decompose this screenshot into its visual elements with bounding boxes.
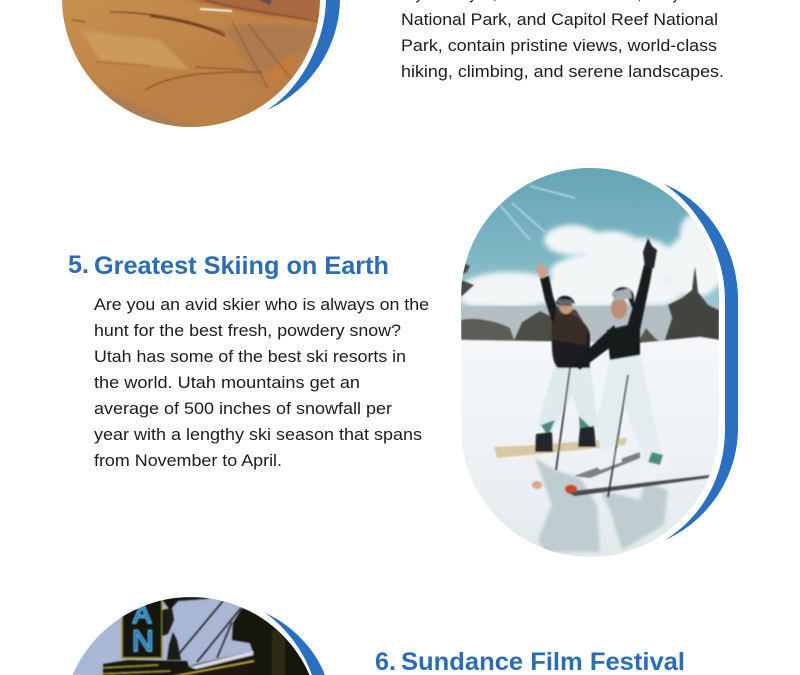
- dark building: [231, 608, 310, 675]
- left skier: [535, 262, 598, 452]
- body text: national parks: National Park, and Capitol Reef National: [401, 10, 718, 29]
- body text: skiing: average of 500 inches of snowfall per: [94, 399, 392, 418]
- right skier: [577, 238, 664, 471]
- body text: national parks: hiking, climbing, and serene landscapes.: [401, 62, 724, 81]
- body text: skiing: year with a lengthy ski season that spans: [94, 425, 422, 444]
- arc accent: top photo: [267, 0, 340, 110]
- silhouettes: [162, 608, 174, 636]
- panel: greatest skiing on earth: [68, 168, 738, 557]
- arc accent: ski photo: [664, 184, 738, 540]
- body text: skiing: from November to April.: [94, 451, 282, 470]
- marquee sign: [122, 592, 162, 658]
- marquee base and ledge: [103, 660, 190, 675]
- ski poles: [556, 368, 628, 497]
- photo: red rock canyon: [62, 0, 320, 130]
- snowboard and skis: [494, 438, 627, 458]
- body text: skiing: hunt for the best fresh, powdery snow?: [94, 321, 401, 340]
- photo: theatre marquee at dusk: N: [132, 625, 154, 658]
- body text: national parks: Park, contain pristine views, world-class: [401, 36, 717, 55]
- photo: theatre marquee at dusk: [72, 597, 310, 675]
- photo: theatre marquee at dusk: A: [133, 599, 151, 629]
- cables: [178, 601, 241, 662]
- body text: skiing: [94, 295, 429, 470]
- photo: two skiers on snow: [458, 168, 725, 557]
- body text: skiing: Are you an avid skier who is always on the: [94, 295, 429, 314]
- heading: section 5: Greatest Skiing on Earth: [94, 252, 389, 280]
- panel: sundance film festival: [62, 592, 685, 675]
- panel: national parks (section 4 continuation): [62, 0, 731, 130]
- arc accent: sundance photo: [265, 613, 328, 675]
- heading: section 5: 5.: [68, 251, 89, 279]
- distant ridge and trees: [461, 306, 719, 346]
- body text: skiing: the world. Utah mountains get an: [94, 373, 360, 392]
- body text: skiing: Utah has some of the best ski resorts in: [94, 347, 406, 366]
- snowfield: [461, 337, 719, 557]
- clouds: [458, 212, 725, 308]
- body text: national parks: [401, 0, 731, 81]
- shadows: [535, 458, 668, 552]
